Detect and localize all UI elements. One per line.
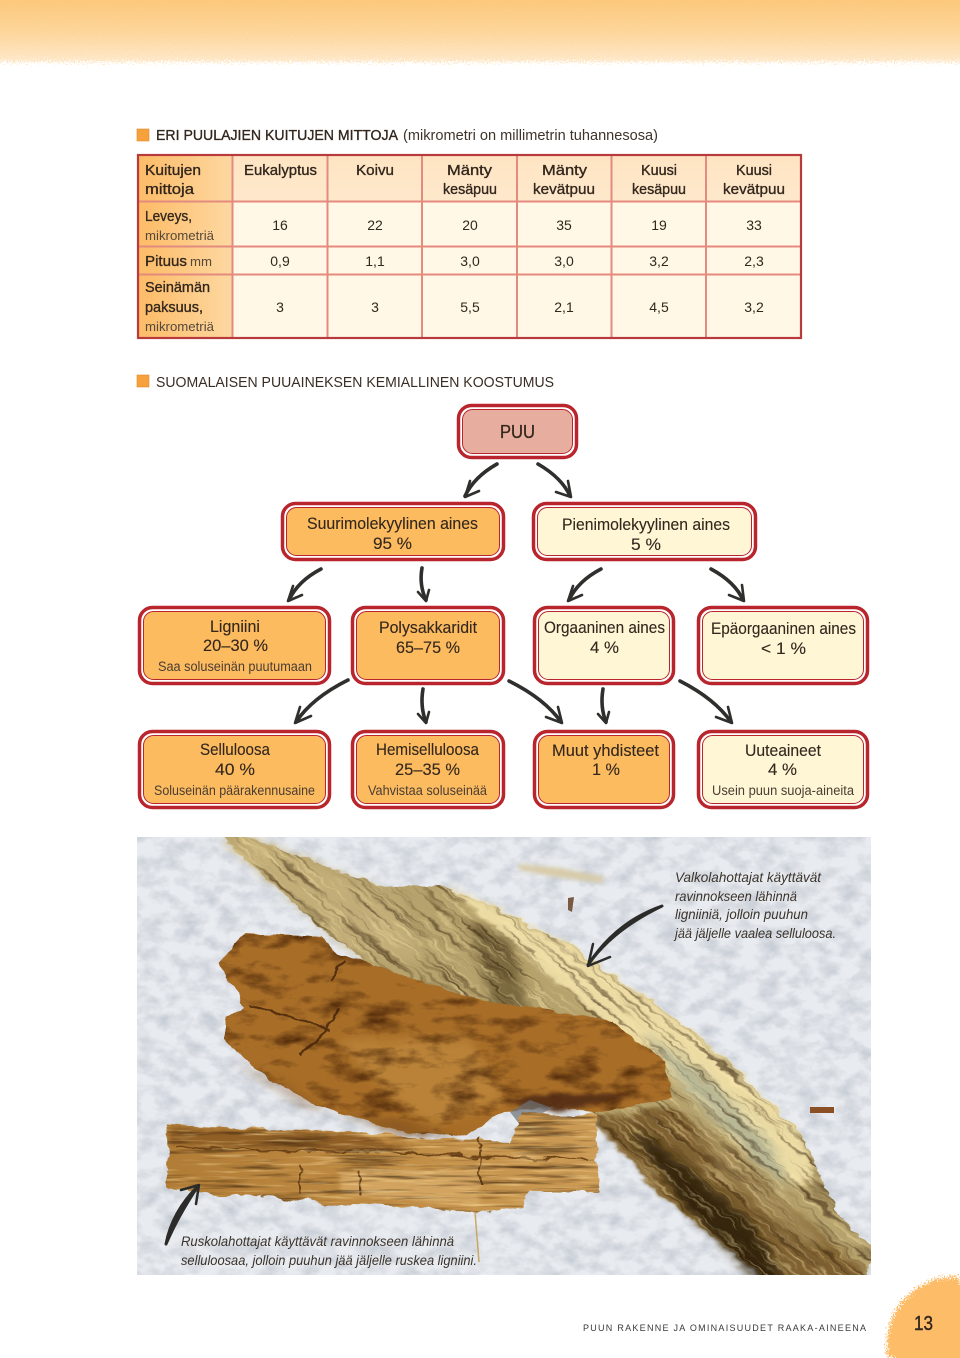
footer running title: PUUN RAKENNE JA OMINAISUUDET RAAKA-AINEENA xyxy=(583,1323,866,1333)
hole shadow xyxy=(510,1100,552,1125)
table header row: mittoja xyxy=(145,181,195,198)
box: hemicellulose xyxy=(352,732,504,808)
table row: width: 20 xyxy=(462,217,478,233)
table row: length: mm xyxy=(190,254,212,269)
arrow: to light wood xyxy=(588,906,662,966)
box: hemicellulose: Hemiselluloosa xyxy=(376,741,480,759)
table row: length xyxy=(145,253,764,270)
page number badge xyxy=(887,1277,960,1358)
box: cellulose: Soluseinän päärakennusaine xyxy=(154,783,315,798)
box: large-molecule material: Suurimolekyylinen aines xyxy=(307,515,478,533)
box: small-molecule material xyxy=(534,504,756,560)
photo background: cloth xyxy=(137,837,871,1275)
table header row: kesäpuu xyxy=(443,181,497,198)
caption: brown rot: Ruskolahottajat käyttävät ravinnokseen lähinnä xyxy=(181,1233,454,1249)
box: organic material: Orgaaninen aines xyxy=(544,619,665,637)
splinter xyxy=(475,1212,479,1262)
arrow: large-molecule to lignin xyxy=(288,569,321,601)
arrow: polysaccharides to cellulose xyxy=(295,680,348,723)
table row: width: 35 xyxy=(556,217,572,233)
brown decayed piece xyxy=(219,933,673,1137)
box: organic material: 4 % xyxy=(590,639,619,657)
table row: width: 22 xyxy=(367,217,383,233)
section heading: fibre dimensions: (mikrometri on millimetrin tuhannesosa) xyxy=(403,127,658,144)
caption: white rot: Valkolahottajat käyttävät xyxy=(675,869,822,885)
table row: wall thickness: 3,2 xyxy=(744,299,764,315)
caption: brown rot: selluloosaa, jolloin puuhun jää jäljelle ruskea ligniini. xyxy=(181,1252,477,1268)
table header row: kesäpuu xyxy=(632,181,686,198)
box: polysaccharides xyxy=(352,608,504,684)
section heading: chemical composition: SUOMALAISEN PUUAINEKSEN KEMIALLINEN KOOSTUMUS xyxy=(156,375,554,391)
caption: white rot xyxy=(673,869,836,941)
table header row: Mänty xyxy=(447,162,493,179)
table header row: Kuitujen xyxy=(145,162,201,179)
box: lignin: Ligniini xyxy=(210,618,260,636)
box: extractives: Uuteaineet xyxy=(745,742,821,760)
box: extractives xyxy=(698,732,868,808)
arrow: organic to extractives, short xyxy=(598,689,609,723)
box: cellulose: Selluloosa xyxy=(200,741,271,759)
table row: length: 1,1 xyxy=(365,253,385,269)
table row: length: 3,2 xyxy=(649,253,669,269)
table row: width xyxy=(145,208,762,243)
box: hemicellulose: 25–35 % xyxy=(395,761,460,779)
section heading: fibre dimensions: ERI PUULAJIEN KUITUJEN MITTOJA xyxy=(156,127,398,144)
arrow: PUU to small-molecule xyxy=(538,464,571,497)
arrow: small-molecule to inorganic xyxy=(711,569,744,601)
table row: width: 16 xyxy=(272,217,288,233)
table row: width: 33 xyxy=(746,217,762,233)
table row: wall thickness: 5,5 xyxy=(460,299,480,315)
table row: length: Pituus xyxy=(145,253,187,270)
caption: white rot: ravinnokseen lähinnä xyxy=(675,888,797,904)
box: other compounds: Muut yhdisteet xyxy=(552,742,659,760)
table row: wall thickness: 3 xyxy=(276,299,284,315)
arrow: PUU to large-molecule xyxy=(465,464,497,497)
table row: wall thickness: Seinämän xyxy=(145,279,210,296)
table row: length: 3,0 xyxy=(460,253,480,269)
box: inorganic material: < 1 % xyxy=(761,640,806,658)
caption: white rot: jää jäljelle vaalea selluloosa. xyxy=(673,925,836,941)
table header row: Kuusi xyxy=(641,162,677,179)
arrow: polysaccharides to hemicellulose xyxy=(418,689,429,723)
top decorative band xyxy=(0,0,960,62)
arrow: organic to other compounds xyxy=(509,681,562,723)
caption: white rot: ligniiniä, jolloin puuhun xyxy=(675,906,808,922)
table header row: kevätpuu xyxy=(533,181,595,198)
box: hemicellulose: Vahvistaa soluseinää xyxy=(368,783,487,798)
box: polysaccharides: Polysakkaridit xyxy=(379,619,477,637)
table row: wall thickness: paksuus, xyxy=(145,299,203,316)
table row: wall thickness: mikrometriä xyxy=(145,319,215,334)
page number badge: 13 xyxy=(914,1313,933,1335)
box: extractives: Usein puun suoja-aineita xyxy=(712,783,854,798)
box: large-molecule material: 95 % xyxy=(373,535,412,553)
box: cellulose: 40 % xyxy=(215,761,255,779)
table header row: Koivu xyxy=(356,162,394,179)
table row: wall thickness: 2,1 xyxy=(554,299,574,315)
box: polysaccharides: 65–75 % xyxy=(396,639,460,657)
wood chips xyxy=(519,864,834,1113)
arrow: to brown stick xyxy=(166,1185,199,1244)
box: other compounds xyxy=(534,732,674,808)
table row: wall thickness: 4,5 xyxy=(649,299,669,315)
arrow: small-molecule to organic xyxy=(568,569,601,601)
table header row: kevätpuu xyxy=(723,181,785,198)
table header row: Mänty xyxy=(542,162,588,179)
table row: length: 2,3 xyxy=(744,253,764,269)
table header row xyxy=(145,162,785,198)
box: small-molecule material: Pienimolekyylinen aines xyxy=(562,516,730,534)
box: cellulose xyxy=(140,732,330,808)
box: PUU xyxy=(458,406,576,458)
table row: wall thickness: 3 xyxy=(371,299,379,315)
box: inorganic material xyxy=(698,608,868,684)
box: lignin: 20–30 % xyxy=(203,637,268,655)
box: PUU: PUU xyxy=(500,422,535,442)
table row: length: 0,9 xyxy=(270,253,290,269)
box: other compounds: 1 % xyxy=(592,761,620,779)
box: organic material xyxy=(534,608,674,684)
table header row: Kuusi xyxy=(736,162,772,179)
caption: brown rot xyxy=(181,1233,477,1268)
arrow: inorganic to extractives xyxy=(680,681,732,723)
light decayed piece: white rot xyxy=(221,837,873,1285)
table row: length: 3,0 xyxy=(554,253,574,269)
table row: width: mikrometriä xyxy=(145,228,215,243)
section heading: fibre dimensions xyxy=(137,127,658,144)
box: lignin xyxy=(140,608,330,684)
table: fibre dimensions by species xyxy=(138,155,801,338)
box: extractives: 4 % xyxy=(768,761,797,779)
box: inorganic material: Epäorgaaninen aines xyxy=(711,620,856,638)
box: large-molecule material xyxy=(282,504,504,560)
table header row: Eukalyptus xyxy=(244,162,317,179)
arrow: large-molecule to polysaccharides xyxy=(418,568,429,601)
table row: width: Leveys, xyxy=(145,208,192,225)
box: lignin: Saa soluseinän puutumaan xyxy=(158,659,312,674)
photo: decayed wood pieces on white cloth xyxy=(137,837,873,1285)
table row: wall thickness xyxy=(145,279,764,334)
lower stick: brown rot xyxy=(167,1113,599,1212)
table row: width: 19 xyxy=(651,217,667,233)
box: small-molecule material: 5 % xyxy=(631,536,661,554)
